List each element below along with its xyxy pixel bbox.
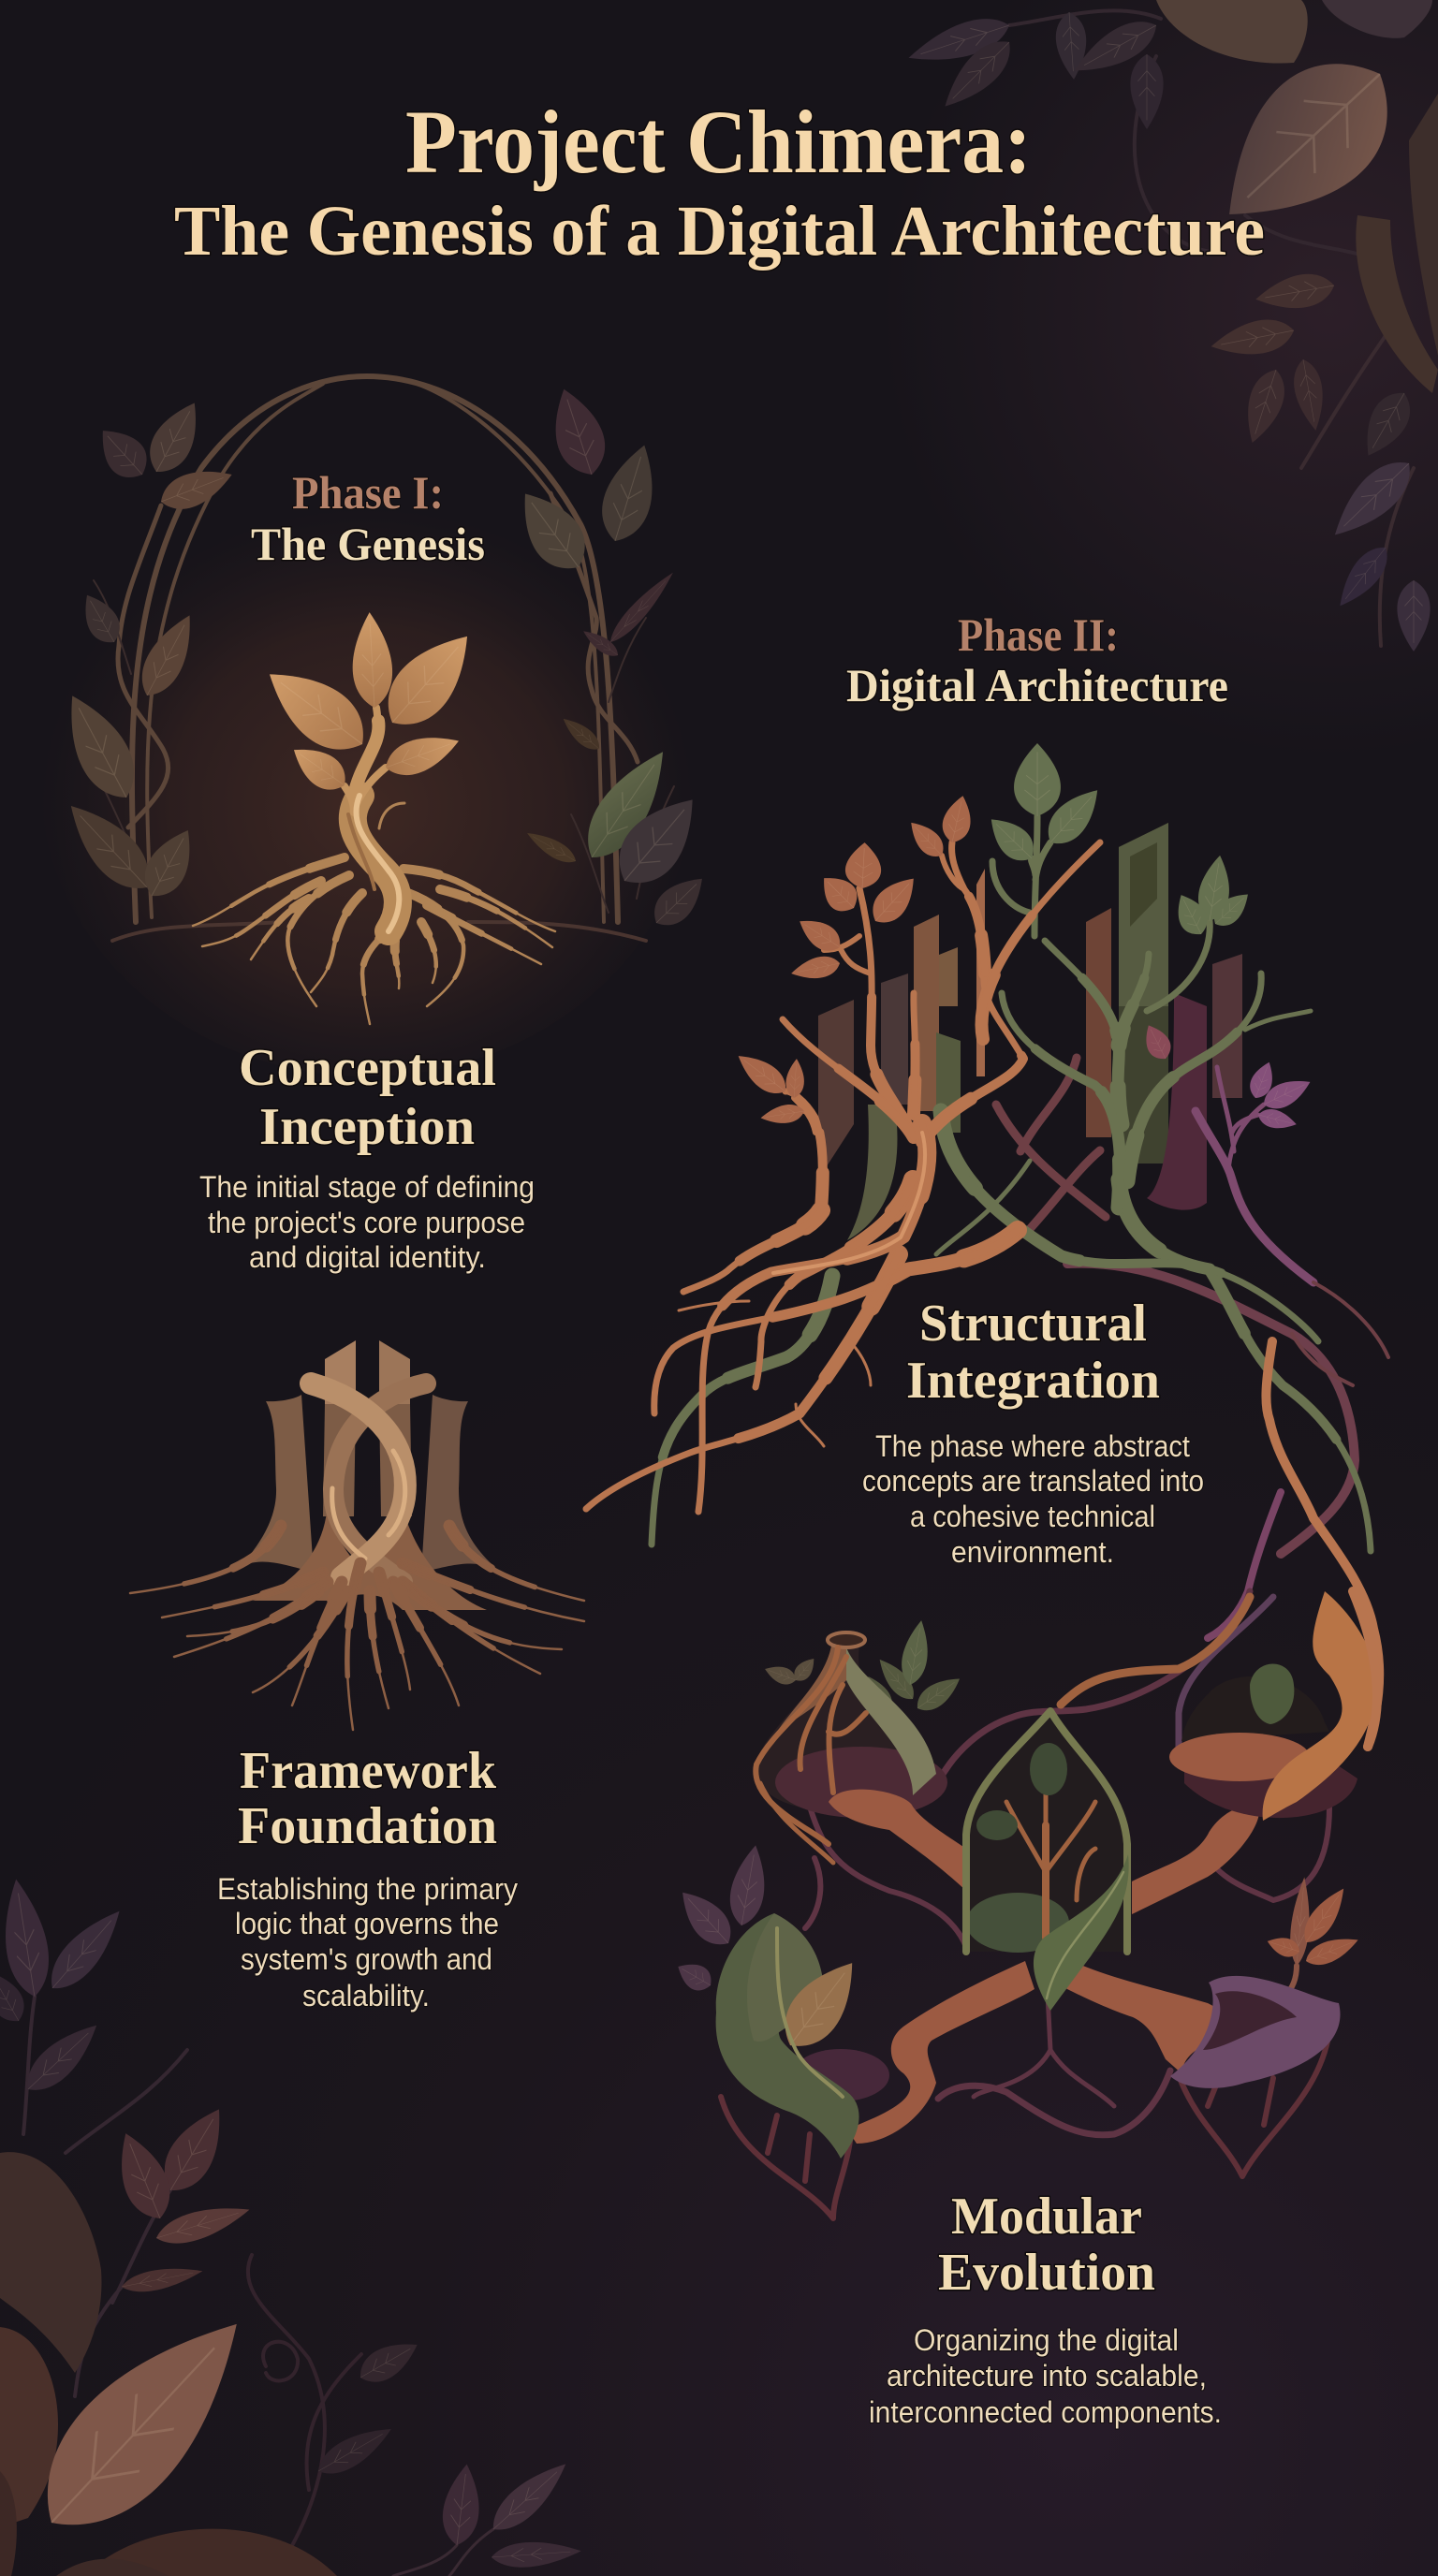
leaves: purple and pink	[1138, 1020, 1315, 1134]
text block: structural integration: Integration	[906, 1352, 1160, 1410]
heading: phase II: Phase II:	[958, 608, 1119, 661]
text block: modular evolution	[869, 2188, 1222, 2429]
roots	[130, 1526, 584, 1730]
heading: phase II	[846, 608, 1228, 711]
trunk	[345, 708, 404, 931]
title	[174, 92, 1265, 271]
text block: framework foundation	[217, 1742, 518, 2012]
text block: conceptual inception: The initial stage of defining	[199, 1170, 535, 1204]
text block: structural integration: Structural	[919, 1295, 1147, 1353]
leaves: green	[981, 743, 1255, 941]
heading: phase I: Phase I:	[292, 466, 444, 519]
title: The Genesis of a Digital Architecture	[174, 192, 1265, 271]
text block: framework foundation: Framework	[240, 1742, 497, 1800]
copper channels	[829, 1790, 1259, 2144]
planks	[325, 1340, 356, 1413]
text block: modular evolution: architecture into scalable,	[887, 2359, 1207, 2393]
text block: modular evolution: Organizing the digital	[914, 2323, 1179, 2357]
panel: modular evolution illustration	[670, 1591, 1377, 2218]
heading: phase I: The Genesis	[251, 518, 485, 570]
copper vines	[586, 842, 1379, 1747]
text block: framework foundation: Establishing the primary	[217, 1872, 518, 1906]
text block: structural integration	[862, 1295, 1204, 1569]
text block: modular evolution: Evolution	[938, 2244, 1155, 2302]
module: top right dome	[1061, 1591, 1377, 1821]
text block: modular evolution: Modular	[951, 2188, 1142, 2246]
decorative foliage: top right	[903, 0, 1438, 651]
glow behind sprout	[39, 477, 695, 1076]
roots	[193, 857, 555, 1024]
text block: structural integration: The phase where abstract	[875, 1429, 1190, 1463]
buildings	[818, 823, 1242, 1240]
text block: structural integration: concepts are translated into	[862, 1464, 1204, 1498]
text block: framework foundation: system's growth and	[241, 1942, 492, 1976]
heading: phase II: Digital Architecture	[846, 659, 1228, 711]
text block: conceptual inception	[199, 1039, 535, 1274]
module: bottom right dish	[1170, 1877, 1362, 2176]
heading: phase I	[251, 466, 485, 570]
twisted bands	[311, 1383, 426, 1582]
sprout leaves	[253, 611, 488, 798]
module: bottom left leaf	[670, 1842, 889, 2218]
text block: modular evolution: interconnected components.	[869, 2395, 1222, 2429]
text block: conceptual inception: and digital identity.	[249, 1240, 486, 1274]
panel: phase I genesis illustration	[39, 376, 713, 1076]
connecting vines	[805, 1591, 1329, 2135]
side leaves	[139, 394, 212, 481]
text block: conceptual inception: Conceptual	[239, 1039, 496, 1097]
module: centre dome	[966, 1711, 1129, 2011]
title: Project Chimera:	[405, 92, 1032, 192]
decorative foliage: bottom left	[0, 1876, 582, 2576]
text block: framework foundation: logic that governs the	[235, 1907, 499, 1940]
text block: structural integration: environment.	[951, 1535, 1114, 1569]
panel: structural integration tree	[586, 743, 1388, 1747]
text block: conceptual inception: Inception	[259, 1098, 475, 1156]
text block: structural integration: a cohesive technical	[910, 1500, 1155, 1533]
text block: framework foundation: scalability.	[302, 1979, 430, 2012]
panel: framework foundation illustration	[130, 1340, 584, 1730]
text block: conceptual inception: the project's core purpose	[208, 1206, 525, 1239]
module: top left vase	[756, 1618, 966, 1863]
maroon and purple vines	[996, 1058, 1388, 1638]
text block: framework foundation: Foundation	[238, 1797, 497, 1855]
green vines	[652, 816, 1371, 1551]
arch of vines	[84, 376, 674, 941]
leaves: copper	[731, 793, 976, 1127]
flared trunk base	[253, 1498, 487, 1610]
